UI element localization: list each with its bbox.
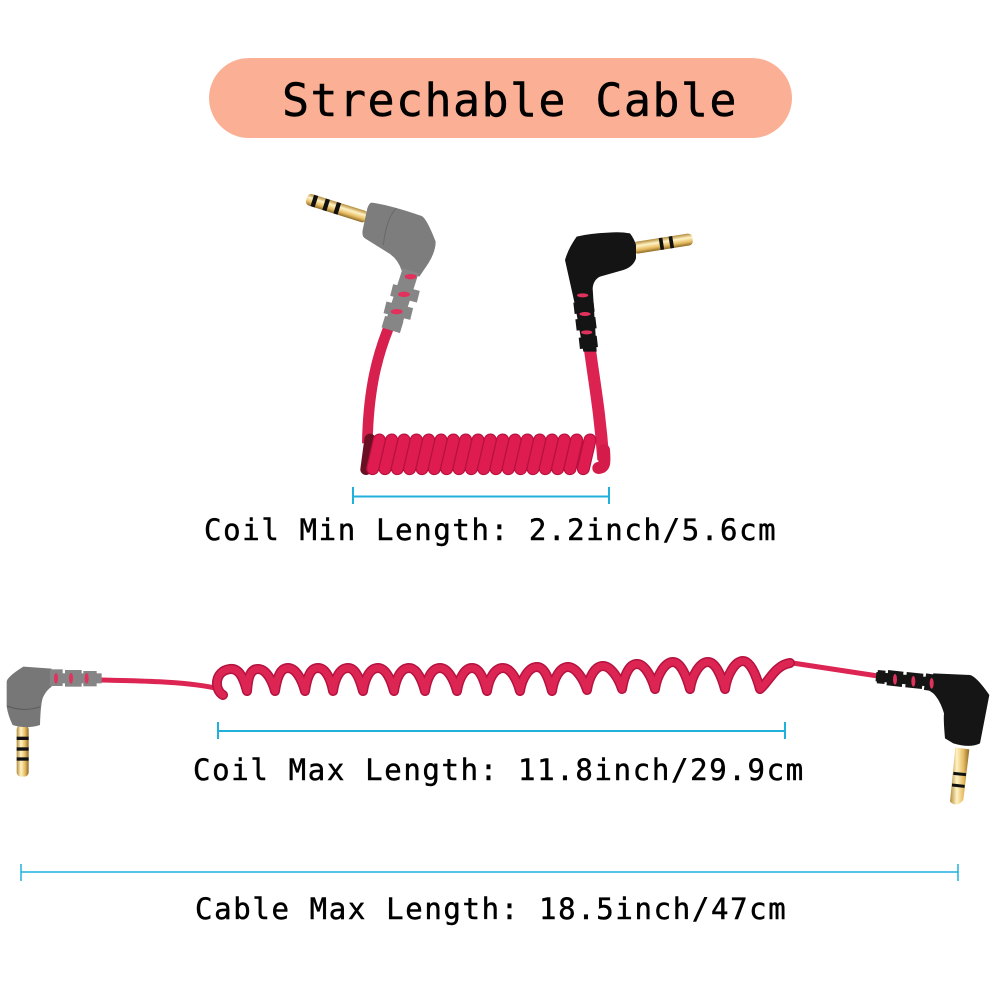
right wire [590, 350, 603, 460]
black relief red marks [577, 293, 592, 334]
coil max measure line [218, 722, 785, 739]
left plug body [7, 667, 52, 727]
min length measure line [353, 487, 609, 504]
black strain relief [574, 306, 597, 343]
coiled cable at minimum length [305, 193, 693, 469]
left wire [100, 680, 220, 689]
cable max measure line [21, 864, 958, 881]
stretched cable [7, 661, 989, 805]
title pill [209, 58, 792, 138]
left plug strain relief [50, 669, 102, 687]
stretched coil [217, 661, 790, 695]
black plug body [565, 232, 636, 352]
left gray plug [7, 667, 102, 777]
right black plug [876, 673, 989, 805]
right plug strain relief [876, 677, 937, 683]
right wire [786, 662, 878, 676]
coil min length label: Coil Min Length: 2.2inch/5.6cm [204, 513, 777, 547]
right plug tip [950, 747, 969, 805]
compressed coil [366, 439, 604, 469]
black plug tip [632, 233, 693, 254]
right plug red marks [893, 674, 934, 689]
left wire [367, 328, 388, 443]
gray plug body [362, 203, 436, 277]
cable max length label: Cable Max Length: 18.5inch/47cm [195, 892, 787, 926]
gray relief red marks [391, 274, 417, 314]
left plug tip [17, 725, 29, 777]
title text: Strechable Cable [282, 74, 738, 127]
coil max length label: Coil Max Length: 11.8inch/29.9cm [193, 753, 805, 787]
right plug body [928, 673, 989, 746]
gray plug tip [305, 193, 369, 223]
left plug red marks [54, 673, 89, 684]
gray strain relief [383, 271, 418, 327]
